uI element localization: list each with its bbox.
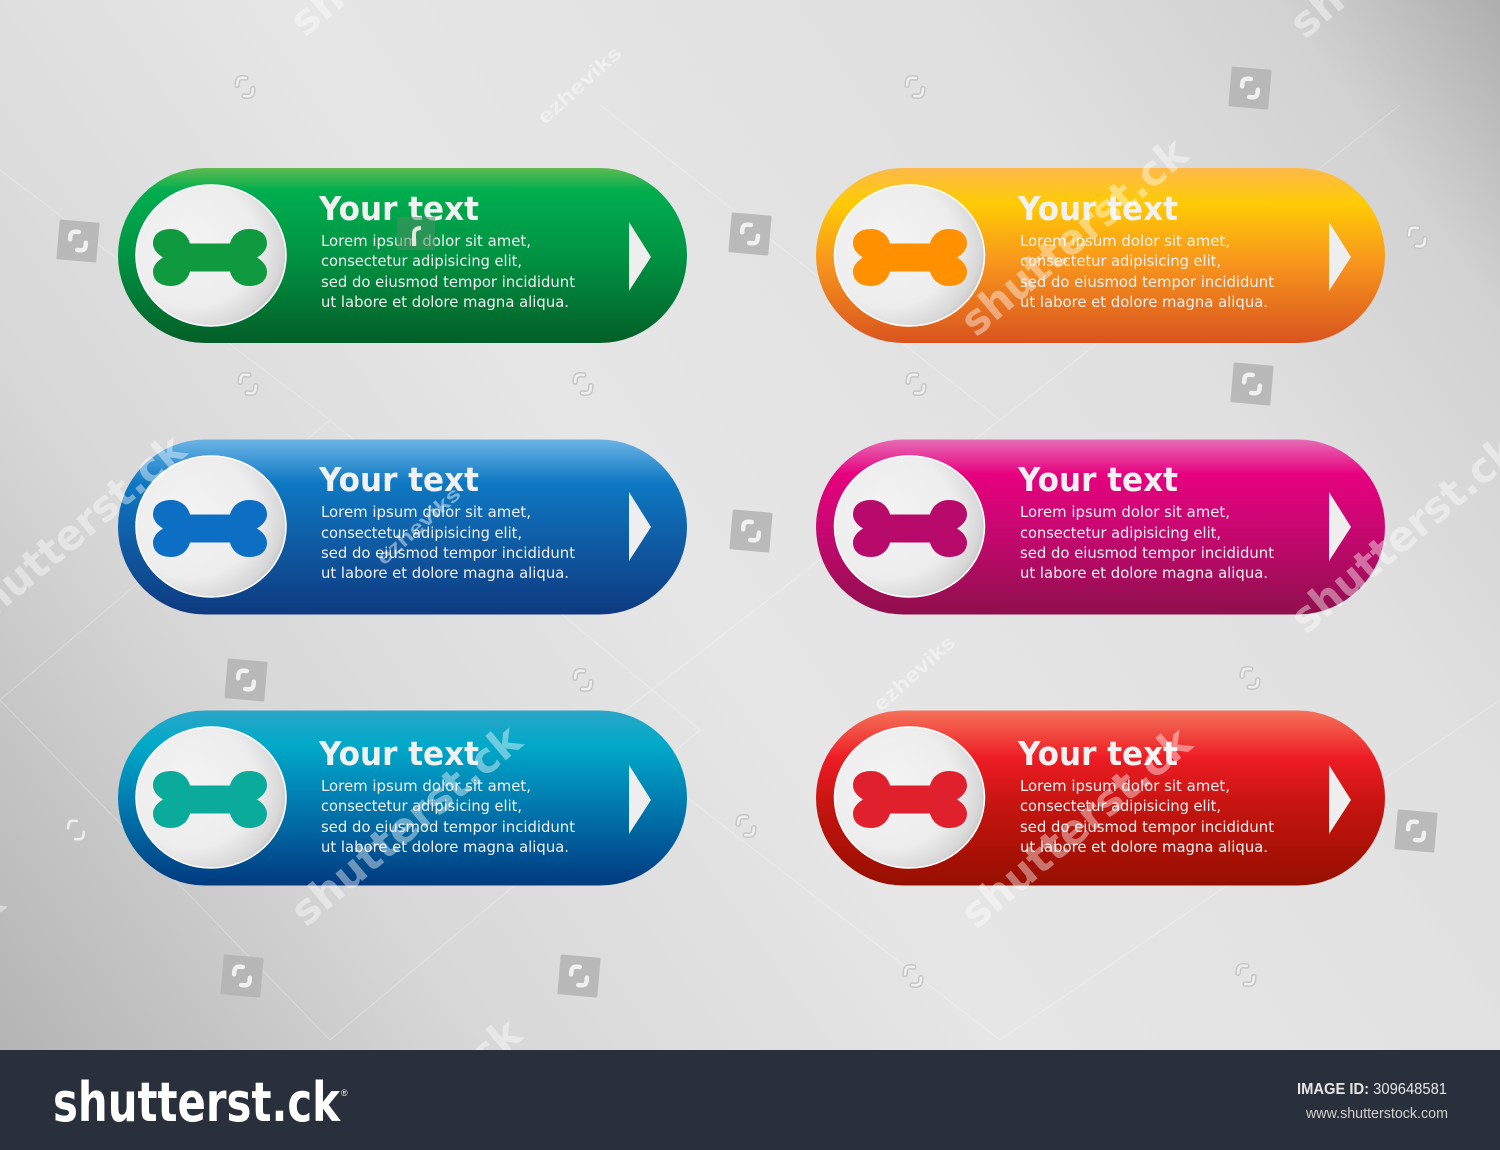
arrow: orange (1329, 222, 1351, 291)
body text: magenta: Lorem ipsum dolor sit amet, (1020, 503, 1230, 521)
icon: bone teal (153, 771, 267, 828)
body text: magenta: ut labore et dolore magna aliqua. (1020, 564, 1268, 582)
heading: red: Your text (1017, 734, 1178, 773)
icon disc: magenta (834, 456, 984, 597)
body text: blue: consectetur adipisicing elit, (321, 524, 522, 542)
icon: bone magenta (853, 500, 967, 557)
body text: green (321, 232, 575, 311)
footer url: www.shutterstock.com (1305, 1105, 1448, 1122)
watermark: stock marks: ezheviks (870, 631, 960, 716)
icon: bone orange (853, 229, 967, 286)
body text: blue: Lorem ipsum dolor sit amet, (321, 503, 531, 521)
footer bar (0, 1050, 1500, 1150)
body text: teal: sed do eiusmod tempor incididunt (321, 818, 575, 836)
watermark: stock marks: ezheviks (373, 483, 465, 570)
body text: green: consectetur adipisicing elit, (321, 252, 522, 270)
heading: teal: Your text (318, 734, 479, 773)
footer registered mark: ® (341, 1088, 348, 1098)
icon disc: blue (136, 456, 286, 597)
icon disc: orange (834, 185, 984, 326)
heading: magenta: Your text (1017, 460, 1178, 499)
body text: blue (321, 503, 575, 582)
body text: red: ut labore et dolore magna aliqua. (1020, 838, 1268, 856)
panel: blue (118, 440, 687, 614)
arrow: green (629, 222, 651, 291)
panel: magenta (816, 440, 1385, 614)
body text: red: sed do eiusmod tempor incididunt (1020, 818, 1274, 836)
watermark: stock marks: shutterst.ck (951, 127, 1198, 346)
body text: red (1020, 777, 1274, 856)
body text: orange: Lorem ipsum dolor sit amet, (1020, 232, 1230, 250)
body text: green: ut labore et dolore magna aliqua. (321, 293, 569, 311)
heading: orange: Your text (1017, 189, 1178, 228)
watermark: small link marks (67, 77, 1426, 986)
body text: teal: consectetur adipisicing elit, (321, 797, 522, 815)
body text: blue: ut labore et dolore magna aliqua. (321, 564, 569, 582)
icon: bone red (853, 771, 967, 828)
icon: bone green (153, 229, 267, 286)
icon disc: green (136, 185, 286, 326)
icon disc: red (834, 727, 984, 868)
body text: red: Lorem ipsum dolor sit amet, (1020, 777, 1230, 795)
arrow: blue (629, 492, 651, 561)
watermark: stock marks: shutterst.ck (951, 716, 1202, 938)
body text: orange (1020, 232, 1274, 311)
body text: red: consectetur adipisicing elit, (1020, 797, 1221, 815)
watermark: stock marks: shutterst.ck (281, 714, 532, 936)
heading: blue: Your text (318, 460, 479, 499)
body text: magenta (1020, 503, 1274, 582)
body text: green: sed do eiusmod tempor incididunt (321, 273, 575, 291)
heading: green: Your text (318, 189, 479, 228)
arrow: magenta (1329, 492, 1351, 561)
panel: red (816, 710, 1385, 886)
body text: orange: consectetur adipisicing elit, (1020, 252, 1221, 270)
body text: orange: sed do eiusmod tempor incididunt (1020, 273, 1274, 291)
panel: teal (118, 710, 687, 886)
body text: teal: Lorem ipsum dolor sit amet, (321, 777, 531, 795)
arrow: red (1329, 765, 1351, 834)
footer logo: shutterst.ck (53, 1071, 341, 1134)
icon: bone blue (153, 500, 267, 557)
body text: magenta: sed do eiusmod tempor incididunt (1020, 544, 1274, 562)
body text: blue: sed do eiusmod tempor incididunt (321, 544, 575, 562)
watermark: square marks (56, 66, 1438, 998)
body text: orange: ut labore et dolore magna aliqua. (1020, 293, 1268, 311)
body text: green: Lorem ipsum dolor sit amet, (321, 232, 531, 250)
body text: teal: ut labore et dolore magna aliqua. (321, 838, 569, 856)
watermark: stock marks: ck (459, 1007, 532, 1080)
body text: teal (321, 777, 575, 856)
panel: orange (816, 168, 1385, 343)
panel: green (118, 168, 687, 343)
icon disc: teal (136, 727, 286, 868)
arrow: teal (629, 765, 651, 834)
body text: magenta: consectetur adipisicing elit, (1020, 524, 1221, 542)
footer image id: IMAGE ID: 309648581 (1297, 1081, 1447, 1098)
watermark: stock marks: ezheviks (534, 42, 626, 129)
